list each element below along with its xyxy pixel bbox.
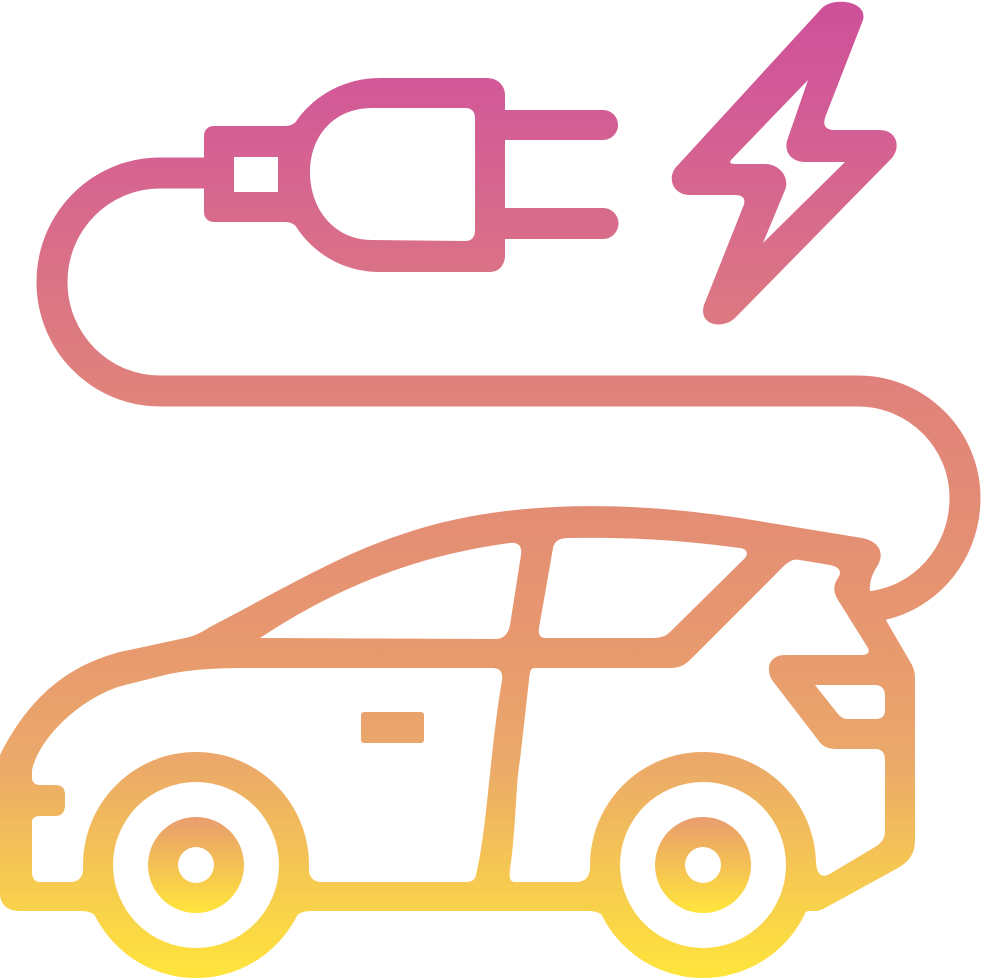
door handle [361,712,424,743]
windows and panels [32,538,885,882]
charging cord [52,173,965,607]
wheel arch fillets [70,860,828,925]
rear wheel [590,752,816,978]
front wheel [83,752,309,978]
plug [204,78,618,272]
lightning bolt [672,2,897,324]
car body [0,506,915,911]
